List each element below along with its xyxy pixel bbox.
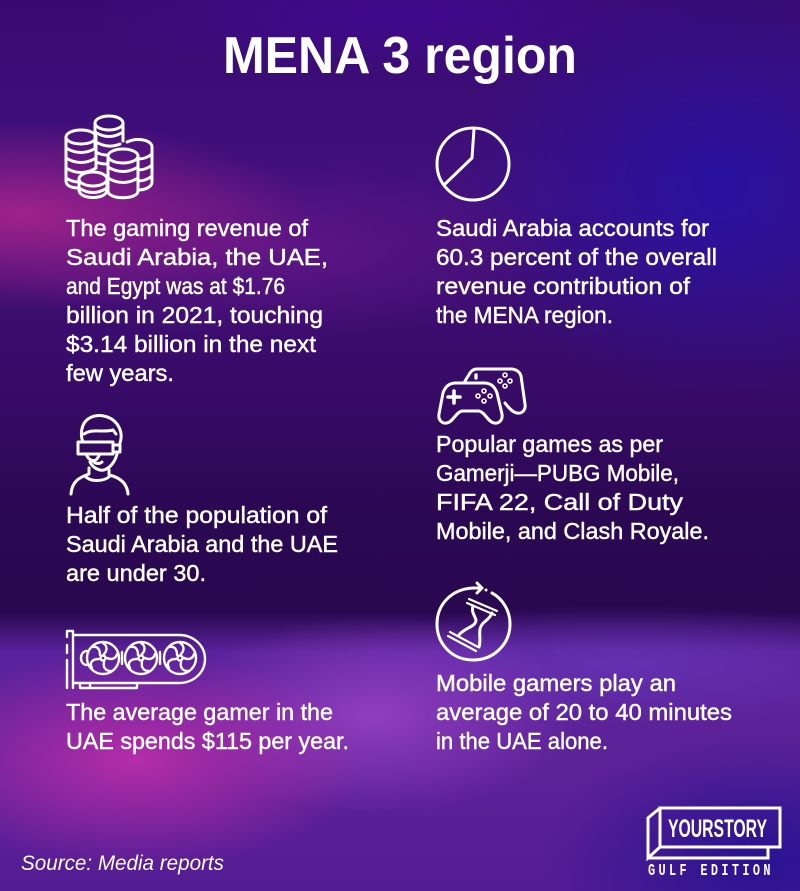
icon: hourglass xyxy=(437,583,510,660)
title: MENA 3 region xyxy=(223,27,577,85)
text: Saudi share xyxy=(436,215,717,328)
text: population: Saudi Arabia and the UAE xyxy=(66,531,338,557)
icon: pie chart xyxy=(437,128,509,200)
text: average gamer: The average gamer in the xyxy=(66,699,333,725)
text: population: are under 30. xyxy=(66,560,206,586)
text: gaming revenue: Saudi Arabia, the UAE, xyxy=(66,244,328,270)
text: Saudi share: 60.3 percent of the overall xyxy=(436,244,717,270)
source note: Source: Media reports xyxy=(21,852,224,875)
icon: VR headset person xyxy=(71,416,128,494)
text: popular games: Gamerji—PUBG Mobile, xyxy=(436,460,679,486)
text: gaming revenue: and Egypt was at $1.76 xyxy=(66,273,285,299)
text: Saudi share: Saudi Arabia accounts for xyxy=(436,215,709,241)
text: mobile gamers: Mobile gamers play an xyxy=(436,670,676,696)
text: mobile gamers xyxy=(436,670,732,754)
text: gaming revenue: The gaming revenue of xyxy=(66,215,309,241)
icon: graphics card xyxy=(67,631,205,688)
icon: coin stacks xyxy=(66,116,152,198)
text: Saudi share: revenue contribution of xyxy=(436,273,691,299)
text: gaming revenue: billion in 2021, touching xyxy=(66,302,323,328)
text: gaming revenue: few years. xyxy=(66,360,174,386)
logo: YourStory Gulf Edition: GULF EDITION xyxy=(648,862,770,881)
text: popular games: Mobile, and Clash Royale. xyxy=(436,518,709,544)
text: population: Half of the population of xyxy=(66,502,328,528)
text: average gamer xyxy=(66,699,349,754)
text: popular games xyxy=(436,431,709,544)
text: population xyxy=(66,502,338,586)
text: average gamer: UAE spends $115 per year. xyxy=(66,728,349,754)
text: gaming revenue: $3.14 billion in the next xyxy=(66,331,317,357)
text: mobile gamers: average of 20 to 40 minutes xyxy=(436,699,732,725)
text: popular games: FIFA 22, Call of Duty xyxy=(436,489,684,515)
text: gaming revenue xyxy=(66,215,328,386)
text: Saudi share: the MENA region. xyxy=(436,302,613,328)
text: mobile gamers: in the UAE alone. xyxy=(436,728,608,754)
icon: game controllers xyxy=(439,369,525,423)
text: popular games: Popular games as per xyxy=(436,431,663,457)
logo: YourStory Gulf Edition xyxy=(648,808,780,881)
